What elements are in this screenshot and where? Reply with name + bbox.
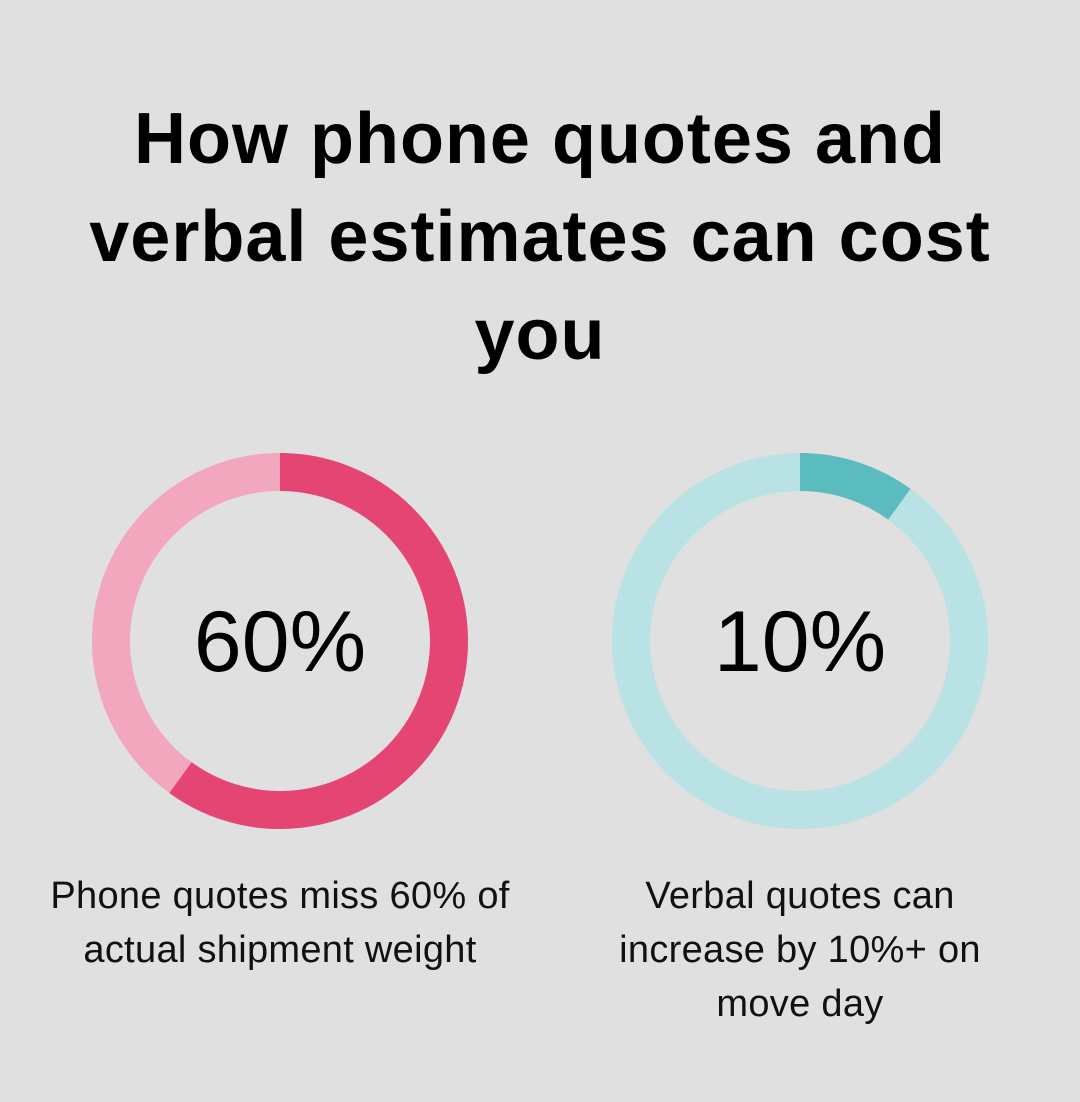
caption: verbal quotes: increase by 10%+ on [619,929,981,971]
caption: phone quotes: actual shipment weight [83,929,477,971]
title: you [474,295,606,375]
chart: 60% donut [92,453,468,829]
caption: verbal quotes [619,875,981,1025]
caption: phone quotes [50,875,510,971]
chart: 60% donut: 60% [194,594,366,690]
title: verbal estimates can cost [89,197,991,277]
title [89,99,991,375]
caption: phone quotes: Phone quotes miss 60% of [50,875,510,917]
caption: verbal quotes: Verbal quotes can [645,875,955,917]
chart: 10% donut: 10% [714,594,886,690]
caption: verbal quotes: move day [716,983,884,1025]
title: How phone quotes and [134,99,946,179]
chart: 10% donut [612,453,988,829]
